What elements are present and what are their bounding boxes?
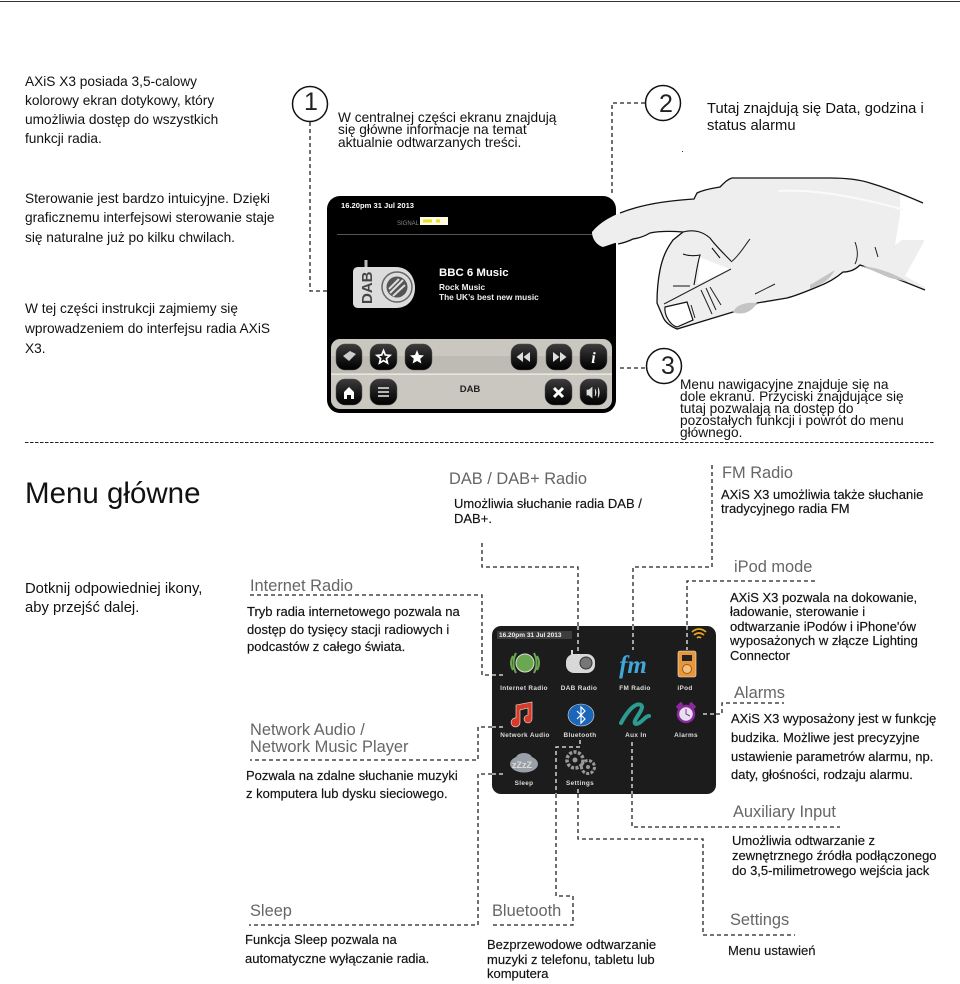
iPod mode description: wyposażonych w złącze Lighting	[729, 633, 918, 648]
icon: FM radio: FM Radio	[619, 685, 651, 692]
icon: bluetooth	[564, 704, 596, 739]
bluetooth description: Bluetooth	[492, 902, 561, 920]
leader lines of the main menu	[249, 465, 840, 935]
section title: Menu główne	[25, 477, 200, 510]
alarms description: budzika. Możliwe jest precyzyjne	[731, 730, 920, 745]
section instruction	[25, 581, 202, 616]
radio screen	[327, 196, 616, 413]
FM radio description	[721, 464, 923, 516]
network audio description: Network Audio /	[250, 721, 365, 739]
hand pointing at screen	[592, 178, 926, 329]
DAB radio description: Umożliwia słuchanie radia DAB /	[454, 496, 642, 511]
callout 3 text: pozostałych funkcji i powrót do menu	[680, 413, 904, 428]
bluetooth description: komputera	[487, 966, 549, 981]
icon: FM radio: fm	[619, 652, 647, 679]
DAB radio description: DAB / DAB+ Radio	[449, 470, 587, 488]
station information	[439, 267, 539, 302]
signal indicator	[397, 217, 448, 227]
icon: network audio: Network Audio	[500, 732, 550, 739]
alarms description: daty, głośności, rodzaju alarmu.	[731, 767, 913, 782]
iPod mode description: ładowanie, sterowanie i	[730, 604, 865, 619]
sleep description: automatyczne wyłączanie radia.	[245, 951, 429, 966]
intro text: section introduction	[24, 301, 270, 356]
icon: sleep	[510, 753, 538, 787]
callout 1 text: aktualnie odtwarzanych treści.	[338, 135, 521, 150]
network audio description	[246, 721, 458, 801]
DAB radio icon: DAB	[359, 271, 376, 304]
icon: DAB radio	[561, 650, 597, 692]
iPod mode description: odtwarzanie iPodów i iPhone'ów	[730, 619, 917, 634]
station information: BBC 6 Music	[439, 267, 509, 279]
DAB radio description	[449, 470, 642, 526]
network audio description: z komputera lub dysku sieciowego.	[246, 786, 448, 801]
intro text: intuitive control: Sterowanie jest bardzo intuicyjne. Dzięki	[25, 191, 270, 206]
callout 3 text: Menu nawigacyjne znajduje się na	[680, 377, 889, 392]
intro text: screen description: AXiS X3 posiada 3,5-calowy	[25, 74, 197, 89]
auxiliary input description	[732, 803, 937, 878]
menu date bar: 16.20pm 31 Jul 2013	[499, 632, 562, 639]
icon: iPod	[677, 651, 696, 692]
callout 1: number circle and leader	[292, 86, 328, 291]
internet radio description	[247, 577, 460, 654]
internet radio description: dostęp do tysięcy stacji radiowych i	[247, 622, 449, 637]
callout 1 text	[338, 110, 557, 150]
DAB radio description: DAB+.	[454, 511, 492, 526]
icon: aux in	[621, 704, 649, 739]
screen date and time: 16.20pm 31 Jul 2013	[341, 201, 414, 210]
intro text: screen description	[25, 74, 218, 146]
auxiliary input description: zewnętrznego źródła podłączonego	[732, 848, 937, 863]
sleep description	[245, 902, 429, 966]
icon: network audio	[500, 702, 550, 739]
callout 2: number circle and leader: 2	[659, 90, 673, 118]
navigation button panel	[331, 339, 612, 409]
alarms description	[731, 684, 936, 782]
signal indicator: SIGNAL	[397, 221, 420, 227]
settings description	[728, 911, 815, 958]
callout 2 text: status alarmu	[707, 118, 796, 134]
callout 2 text	[707, 101, 924, 134]
intro text: screen description: kolorowy ekran dotykowy, który	[25, 93, 214, 108]
main menu screen	[492, 626, 716, 794]
icon: sleep: Sleep	[515, 780, 533, 787]
intro text: section introduction: W tej części instrukcji zajmiemy się	[25, 301, 238, 316]
icon: settings	[566, 752, 594, 787]
icon: alarms	[674, 703, 698, 739]
iPod mode description: iPod mode	[734, 558, 812, 576]
network audio description: Pozwala na zdalne słuchanie muzyki	[246, 768, 458, 783]
iPod mode description: Connector	[730, 648, 791, 663]
internet radio description: podcastów z całego świata.	[247, 639, 405, 654]
bluetooth description: Bezprzewodowe odtwarzanie	[487, 937, 656, 952]
callout 3 text: tutaj pozwalają na dostęp do	[680, 401, 854, 416]
alarms description: ustawienie parametrów alarmu, np.	[731, 749, 933, 764]
icon: bluetooth: Bluetooth	[564, 732, 596, 739]
sleep description: Sleep	[250, 902, 292, 920]
callout 1 text: W centralnej części ekranu znajdują	[338, 110, 557, 125]
callout 1: number circle and leader: 1	[304, 88, 318, 116]
callout 2 text: Tutaj znajdują się Data, godzina i	[707, 101, 924, 117]
DAB radio icon	[353, 260, 415, 308]
icon: FM radio	[619, 652, 651, 692]
callout 2: number circle and leader	[612, 86, 680, 196]
bluetooth description	[487, 902, 656, 981]
callout 3 text	[680, 377, 904, 440]
icon: aux in: Aux In	[625, 732, 647, 739]
FM radio description: tradycyjnego radia FM	[721, 501, 850, 516]
intro text: intuitive control	[25, 191, 275, 245]
icon: iPod: iPod	[677, 685, 693, 692]
intro text: intuitive control: graficznemu interfejsowi sterowanie staje	[25, 210, 275, 225]
intro text: section introduction: wprowadzeniem do interfejsu radia AXiS	[24, 321, 270, 336]
callout 1 text: się główne informacje na temat	[338, 122, 527, 137]
auxiliary input description: do 3,5-milimetrowego wejścia jack	[732, 863, 930, 878]
icon: alarms: Alarms	[674, 732, 698, 739]
FM radio description: FM Radio	[722, 464, 793, 482]
iPod mode description: AXiS X3 pozwala na dokowanie,	[730, 590, 917, 605]
network audio description: Network Music Player	[250, 738, 409, 756]
navigation button panel: DAB	[460, 384, 480, 395]
icon: wifi	[692, 629, 706, 638]
settings description: Settings	[730, 911, 789, 929]
callout 3 text: głównego.	[680, 425, 742, 440]
station information: Rock Music	[439, 282, 485, 292]
callout 3: number circle and leader	[620, 348, 682, 384]
section instruction: Dotknij odpowiedniej ikony,	[25, 581, 202, 597]
icon: settings: Settings	[566, 780, 594, 787]
icon: DAB radio: DAB Radio	[561, 685, 597, 692]
callout 3: number circle and leader: 3	[661, 352, 675, 380]
icon: internet radio: Internet Radio	[500, 685, 548, 692]
intro text: screen description: funkcji radia.	[25, 131, 102, 146]
internet radio description: Internet Radio	[250, 577, 353, 595]
settings description: Menu ustawień	[728, 943, 815, 958]
intro text: intuitive control: się naturalne już po kilku chwilach.	[25, 230, 235, 245]
intro text: screen description: umożliwia dostęp do wszystkich	[25, 112, 218, 127]
intro text: section introduction: X3.	[25, 341, 46, 356]
bluetooth description: muzyki z telefonu, tabletu lub	[487, 952, 655, 967]
auxiliary input description: Auxiliary Input	[733, 803, 836, 821]
FM radio description: AXiS X3 umożliwia także słuchanie	[721, 487, 923, 502]
alarms description: Alarms	[734, 684, 785, 702]
icon: sleep: zZzZ	[512, 760, 532, 770]
section instruction: aby przejść dalej.	[25, 600, 139, 616]
internet radio description: Tryb radia internetowego pozwala na	[247, 604, 460, 619]
callout 3 text: dole ekranu. Przyciski znajdujące się	[680, 389, 904, 404]
navigation button panel: i	[591, 350, 596, 367]
auxiliary input description: Umożliwia odtwarzanie z	[732, 833, 875, 848]
alarms description: AXiS X3 wyposażony jest w funkcję	[731, 711, 936, 726]
sleep description: Funkcja Sleep pozwala na	[245, 932, 398, 947]
station information: The UK’s best new music	[439, 292, 539, 302]
iPod mode description	[729, 558, 918, 663]
icon: internet radio	[500, 653, 548, 692]
